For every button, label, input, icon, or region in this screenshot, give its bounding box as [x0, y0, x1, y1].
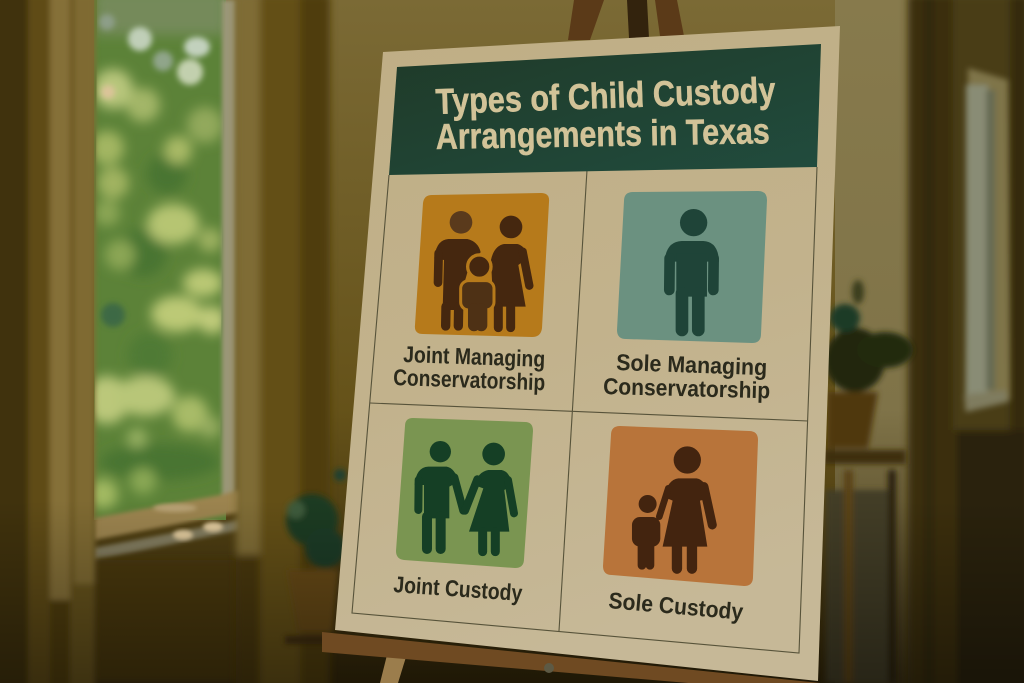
icon box: terracotta — [603, 426, 758, 586]
easel lower leg — [380, 655, 406, 683]
icon: family of three — [434, 211, 529, 328]
panel: sole custody — [603, 426, 758, 625]
header banner — [389, 44, 821, 175]
icon: couple holding hands — [415, 441, 514, 552]
left plant and pot — [285, 469, 346, 644]
bottom shade — [0, 500, 1024, 683]
window frame and sill — [94, 0, 240, 560]
left window with blurred foliage — [85, 0, 226, 520]
right curtain — [236, 0, 330, 683]
easel rail — [322, 632, 830, 683]
icon: parent and child — [632, 446, 712, 569]
right plant, pot and table — [824, 280, 913, 683]
title — [435, 69, 776, 157]
label: Conservatorship — [603, 373, 770, 403]
label: Sole Managing — [616, 349, 768, 380]
label: Conservatorship — [393, 364, 546, 395]
title: Arrangements in Texas — [435, 110, 770, 157]
wall below window — [92, 560, 242, 683]
label: Joint Custody — [393, 571, 523, 606]
icon box: teal — [617, 191, 767, 343]
icon: single person — [665, 209, 719, 330]
panel: joint managing conservatorship — [393, 193, 549, 395]
right window — [964, 68, 1010, 412]
label — [603, 349, 770, 403]
easel top legs — [568, 0, 684, 40]
label: Sole Custody — [608, 587, 745, 625]
poster grid — [352, 167, 817, 653]
poster board — [335, 26, 840, 681]
label — [393, 341, 546, 395]
icon box: green — [396, 418, 533, 568]
panel: joint custody — [393, 418, 533, 606]
title: Types of Child Custody — [435, 69, 776, 122]
left curtain — [0, 0, 95, 683]
door post — [908, 0, 1024, 683]
rail peg — [544, 663, 554, 673]
label: Joint Managing — [403, 341, 546, 372]
icon box: orange — [415, 193, 549, 337]
panel: sole managing conservatorship — [603, 191, 770, 403]
right wall — [835, 0, 915, 683]
